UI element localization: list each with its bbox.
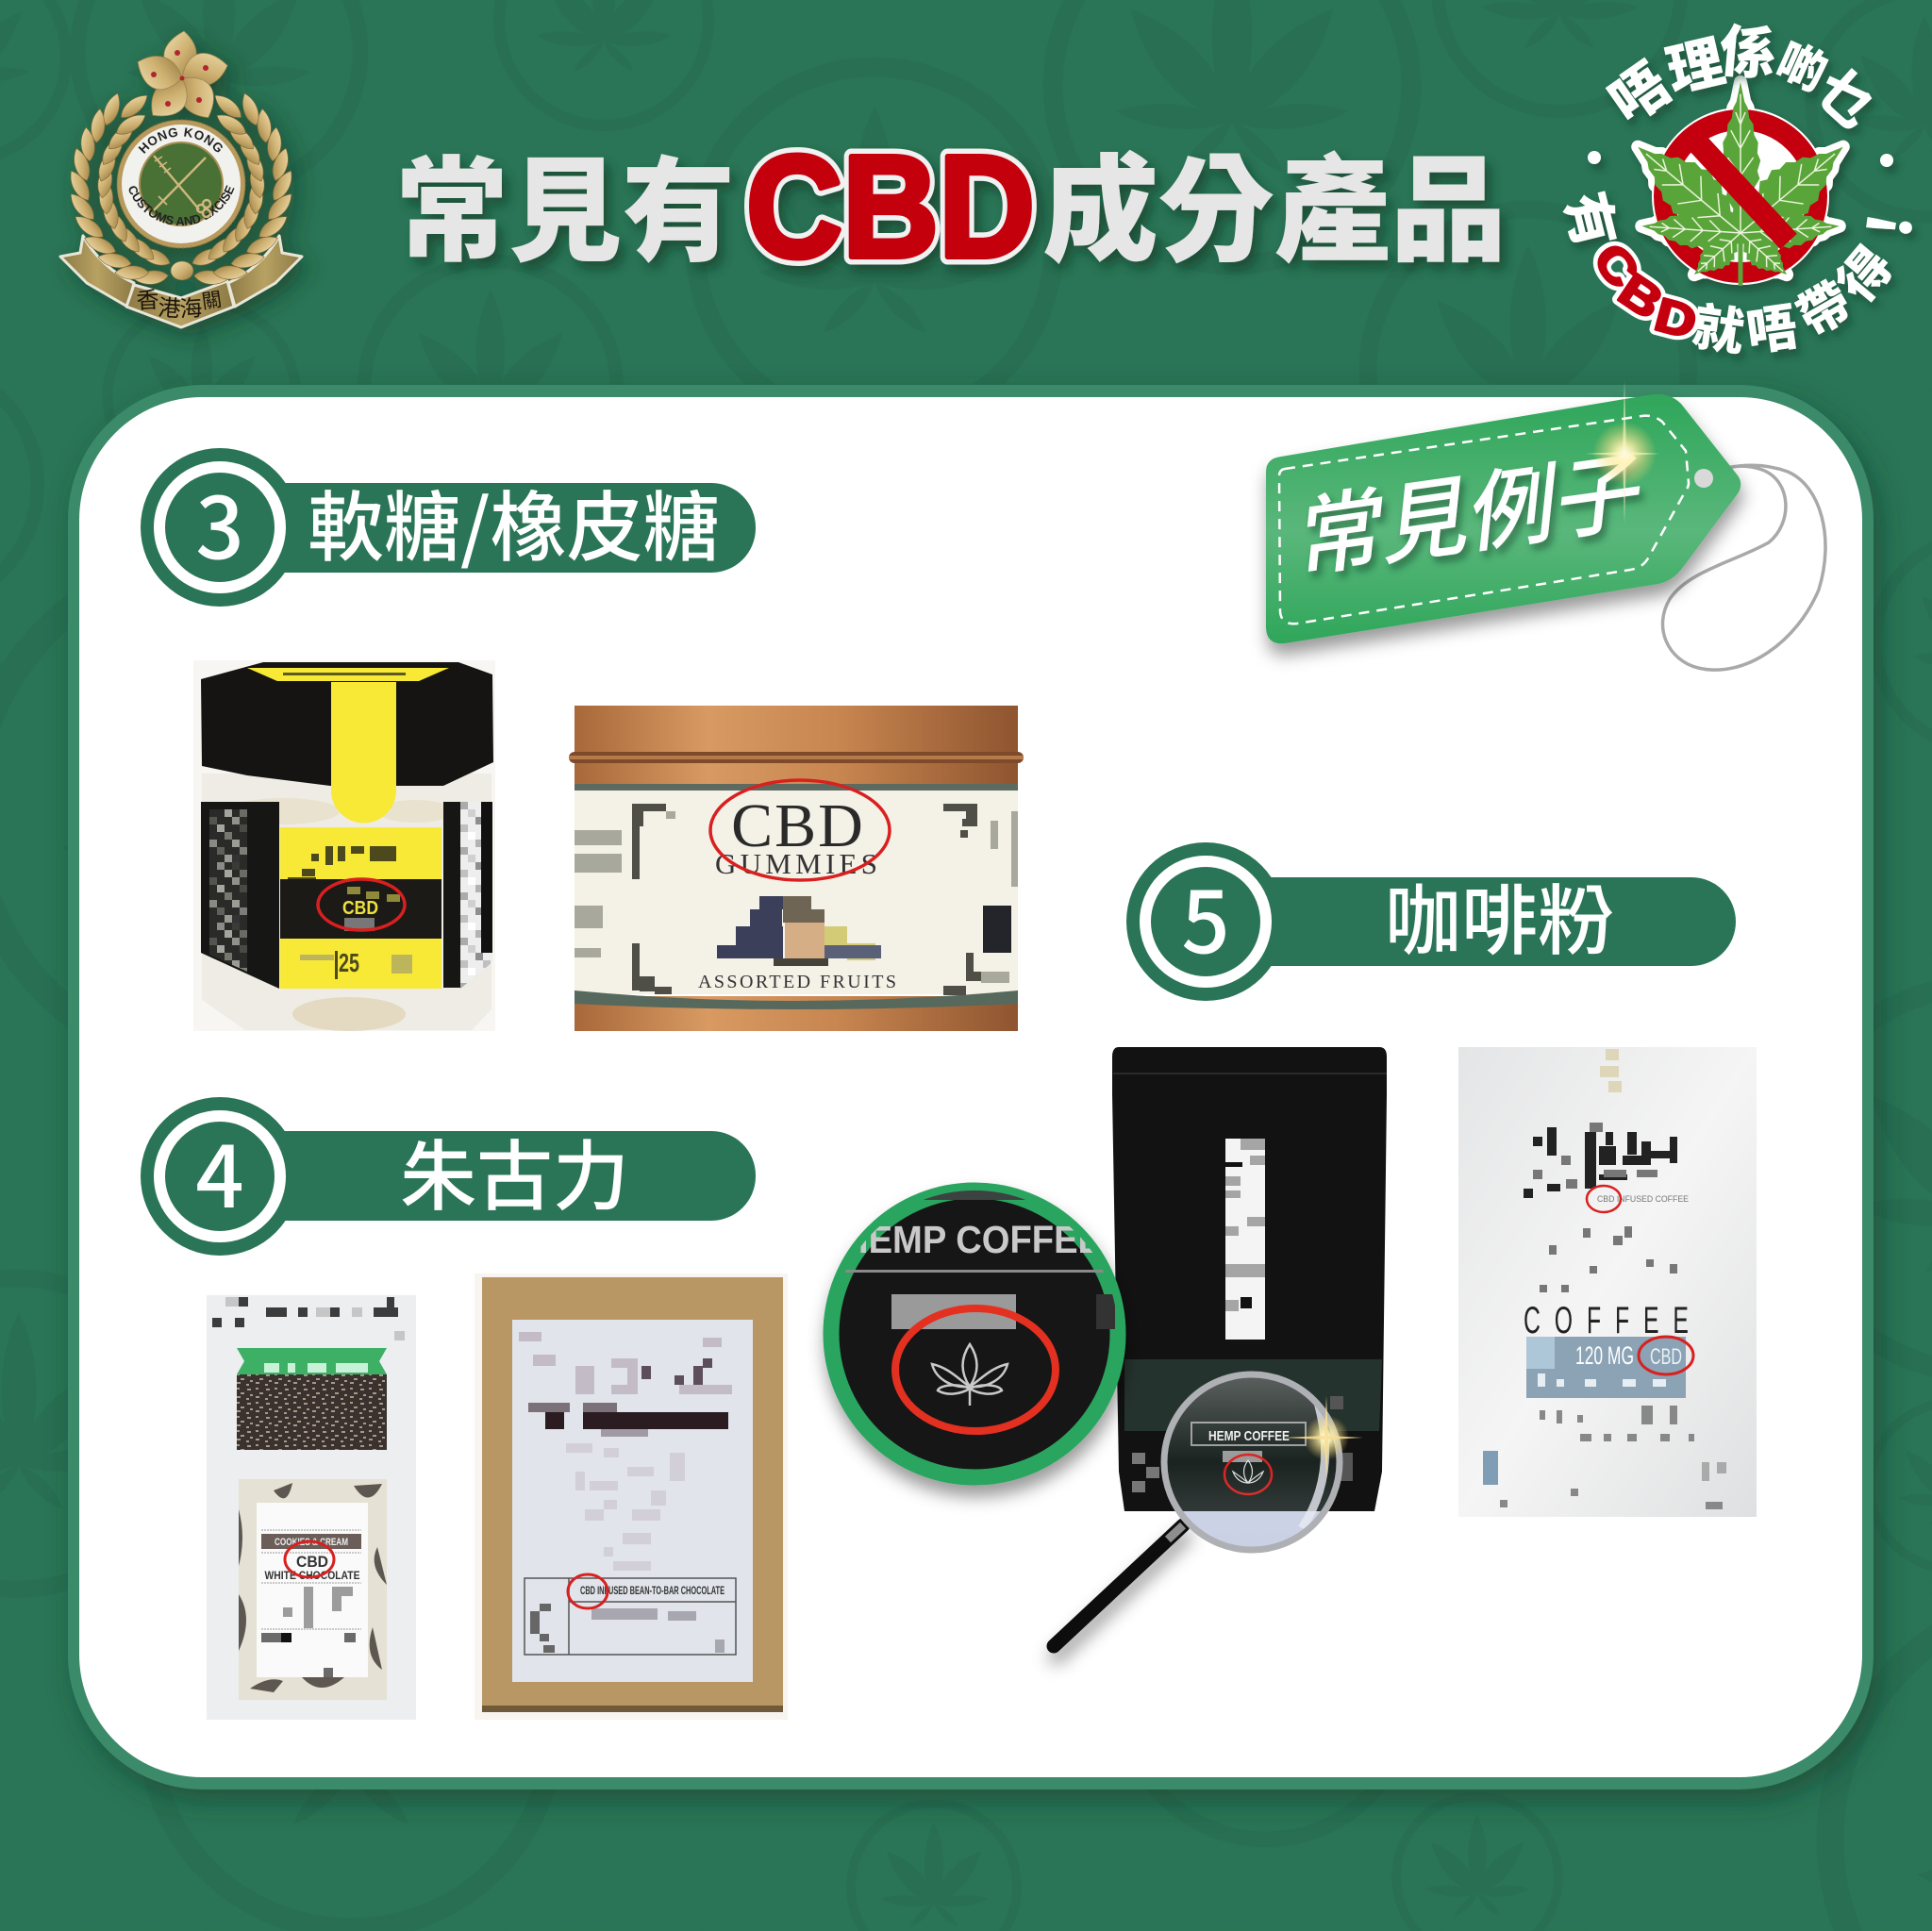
ribbon label: 關	[200, 284, 224, 315]
section heading 3: 軟糖/橡皮糖	[308, 467, 720, 577]
badge CBD letters: D	[1649, 288, 1703, 349]
badge curved text: 得	[1817, 228, 1907, 315]
product: chocolate bar bag: COOKIES & CREAM	[275, 1537, 348, 1548]
wreath	[65, 91, 173, 287]
section heading 5: 5	[1181, 855, 1230, 977]
section heading 4	[141, 1097, 756, 1256]
red circle	[318, 879, 405, 930]
badge medallion: CUSTOMS AND EXCISE	[128, 185, 234, 226]
badge CBD letters: B	[1609, 262, 1673, 329]
yellow strap	[331, 682, 396, 823]
section heading 4: 朱古力	[400, 1116, 629, 1226]
title: 常見有	[395, 120, 735, 284]
title highlight CBD: CBD	[746, 125, 1035, 288]
product: chocolate bar bag	[207, 1295, 416, 1720]
lower mosaic	[1500, 1406, 1723, 1509]
section heading 5	[1126, 842, 1736, 1001]
tin label	[575, 791, 1018, 994]
product: white coffee pack: CBD	[1650, 1344, 1682, 1370]
badge: no CBD cannabis stamp	[1549, 6, 1930, 366]
magnifier lens	[1160, 1374, 1349, 1558]
product: white coffee pack	[1458, 1047, 1757, 1517]
section heading 4: 4	[195, 1109, 244, 1232]
badge medallion	[114, 108, 262, 285]
product: gummy jar: CBD	[342, 898, 378, 919]
zoom callout: hemp logo	[830, 1189, 1123, 1477]
badge CBD letters: B	[1609, 262, 1673, 329]
sparkle	[1585, 380, 1660, 524]
pixels near lens	[1132, 1453, 1159, 1492]
product: black hemp coffee bag	[1054, 1047, 1387, 1646]
badge CBD letters	[1583, 233, 1703, 349]
tag hole	[1694, 469, 1713, 488]
badge curved text: 乜	[1801, 46, 1897, 144]
title: 成分產品	[1042, 117, 1507, 285]
crossed key and sword	[154, 156, 210, 217]
prohibition slash	[1696, 141, 1789, 241]
title highlight CBD: CBD	[746, 125, 1035, 288]
customs emblem logo	[58, 30, 313, 344]
ribbon tails	[60, 236, 302, 327]
magnifier lens: HEMP COFFEE	[1208, 1428, 1290, 1444]
badge curved text: 啲	[1768, 24, 1839, 105]
badge curved text: 就	[1689, 285, 1750, 366]
jar body	[202, 774, 491, 1030]
box label	[512, 1320, 753, 1682]
pixelated corners	[632, 804, 981, 995]
badge CBD letters: C	[1583, 233, 1650, 298]
section heading 5: 咖啡粉	[1385, 860, 1614, 971]
black band	[280, 879, 441, 939]
info box	[525, 1578, 736, 1655]
product: kraft chocolate box	[475, 1273, 788, 1720]
green band	[237, 1348, 387, 1374]
black cap	[201, 662, 493, 786]
ribbon label: 海	[178, 289, 203, 324]
ribbon label: 港	[158, 289, 182, 324]
cannabis leaf	[1620, 82, 1861, 287]
red circle	[568, 1574, 608, 1608]
pixel column	[1225, 1139, 1265, 1340]
tag body	[1266, 394, 1740, 643]
product: kraft chocolate box: CBD INFUSED BEAN-TO-BAR CHOCOLATE	[580, 1586, 724, 1597]
badge curved text: 唔	[1740, 285, 1802, 366]
badge curved text	[1549, 6, 1930, 366]
product: gummy jar	[193, 660, 495, 1031]
product: chocolate bar bag: WHITE CHOCOLATE	[264, 1569, 360, 1582]
dark wraps	[201, 802, 279, 989]
label mosaic	[519, 1332, 732, 1394]
label mosaic	[283, 1587, 353, 1628]
title	[395, 117, 1507, 288]
tag string	[1662, 465, 1825, 670]
mosaic logo	[1600, 1049, 1622, 1092]
chips	[237, 1374, 387, 1450]
small CBD line: CBD INFUSED COFFEE	[1597, 1194, 1689, 1204]
cookies card	[239, 1479, 387, 1700]
product: gummy tin: ASSORTED FRUITS	[698, 972, 896, 992]
product: chocolate bar bag: CBD	[296, 1553, 328, 1571]
product: gummy tin	[569, 706, 1024, 1031]
dosage text: 25	[339, 948, 359, 977]
badge curved text: 帶	[1781, 260, 1862, 350]
badge CBD letters: C	[1583, 233, 1650, 298]
zoom callout: hemp logo: HEMP COFFEE	[842, 1218, 1102, 1261]
badge curved text: 理	[1657, 16, 1731, 108]
bauhinia flower	[131, 31, 231, 127]
stitched border	[1279, 416, 1689, 624]
badge curved text: 係	[1717, 6, 1780, 92]
top mosaic	[212, 1297, 398, 1327]
fruit mosaic	[717, 896, 786, 958]
tin text: CBD	[731, 791, 865, 860]
yellow label	[280, 827, 441, 989]
product: white coffee pack: 120 MG	[1575, 1341, 1634, 1370]
magnifier handle	[1054, 1525, 1183, 1646]
scattered mosaic	[1540, 1226, 1677, 1292]
tag: common examples	[1266, 380, 1825, 670]
section heading 3: 3	[195, 460, 244, 583]
badge medallion: HONG KONG	[138, 127, 223, 154]
hemp leaf icon	[932, 1344, 1008, 1406]
section heading 3	[141, 448, 756, 607]
red circle	[710, 780, 890, 880]
tag text: 常見例子	[1293, 419, 1651, 595]
white label	[257, 1503, 368, 1677]
leaf and circle white outline	[1620, 82, 1861, 287]
blue block	[1526, 1337, 1686, 1398]
lens flare	[1283, 1396, 1363, 1479]
ribbon label: 香	[136, 281, 159, 315]
prohibition ring	[1664, 120, 1817, 273]
red circle	[285, 1541, 334, 1577]
wreath knot	[171, 261, 193, 280]
product: gummy tin: GUMMIES	[715, 847, 877, 880]
badge curved text: !	[1842, 208, 1930, 242]
product: white coffee pack: COFFEE	[1524, 1300, 1703, 1342]
ribbon label	[136, 281, 224, 324]
badge curved text: 有	[1549, 183, 1640, 255]
main white panel	[68, 385, 1874, 1790]
badge CBD letters: D	[1649, 288, 1703, 349]
badge curved text: 唔	[1591, 40, 1684, 140]
